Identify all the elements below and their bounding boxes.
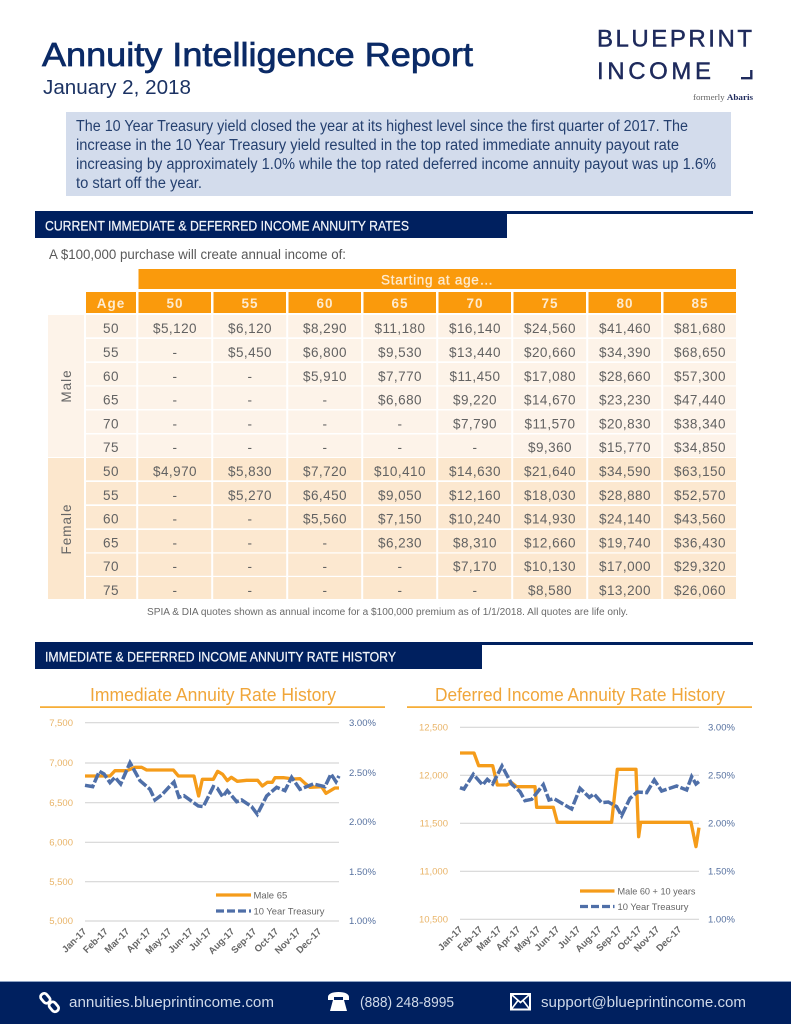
row: female 70: $10,130	[524, 559, 576, 574]
table column headers: 85	[691, 296, 709, 311]
x axis labels: Apr-17	[125, 926, 154, 955]
row: female 60: -	[173, 512, 177, 526]
phone number: (888) 248-8995	[360, 994, 454, 1011]
row: male 65: -	[323, 392, 327, 408]
row: male 75	[103, 440, 726, 455]
left axis: 5,500	[49, 877, 73, 888]
row: female 55: $6,450	[303, 488, 347, 503]
section heading: current rates: CURRENT IMMEDIATE & DEFERRED INCOME ANNUITY RATES	[45, 218, 409, 234]
row: female 75: -	[473, 583, 477, 598]
table column headers: 75	[541, 296, 559, 311]
row: female 50: $5,830	[228, 464, 272, 479]
table column headers: 50	[166, 296, 184, 311]
x axis labels: May-17	[144, 926, 174, 957]
row: male 75: $9,360	[528, 440, 572, 455]
row: male 75: $15,770	[599, 440, 651, 455]
x axis labels: Mar-17	[103, 926, 132, 956]
row: male 75: -	[323, 440, 327, 455]
summary callout: increasing by approximately 1.0% while the top rated deferred income annuity payout was up 1.6%	[76, 156, 716, 173]
row: male 70: -	[323, 416, 327, 432]
row: female 60: $14,930	[524, 512, 576, 526]
right axis: 1.00%	[708, 914, 735, 926]
legend: 10 Year Treasury	[254, 906, 325, 918]
x axis labels: Feb-17	[81, 926, 111, 956]
row: male 60: $5,910	[303, 369, 347, 384]
row: female 65: $19,740	[599, 536, 651, 550]
row: female 75: -	[173, 583, 177, 598]
right axis: 2.00%	[708, 818, 735, 830]
x axis labels: Jul-17	[556, 924, 583, 952]
legend: 10 Year Treasury	[618, 902, 689, 913]
section heading: current rates	[35, 211, 753, 238]
row: male 55: 55	[103, 345, 119, 360]
row: male 55: $68,650	[674, 345, 726, 360]
row: female 60	[103, 512, 726, 526]
website address: annuities.blueprintincome.com	[69, 994, 274, 1011]
row: male 70: -	[173, 416, 177, 432]
left axis: 7,000	[49, 758, 73, 769]
footer contact bar	[0, 981, 791, 1024]
row: male 60: $57,300	[674, 369, 726, 384]
row: female 50: $34,590	[599, 464, 651, 479]
row: male 65: $9,220	[453, 392, 497, 408]
row: female 55: $18,030	[524, 488, 576, 503]
x axis labels: Aug-17	[574, 924, 604, 955]
row: male 60: $11,450	[450, 369, 500, 384]
right axis: 3.00%	[349, 718, 376, 729]
icon: link	[39, 992, 60, 1013]
row: male 50: $8,290	[303, 321, 347, 336]
summary callout	[66, 112, 731, 196]
row: male 65: $6,680	[378, 392, 422, 408]
rates table	[48, 269, 736, 599]
row: female 50	[103, 464, 726, 479]
line: male 60 + 10 years	[460, 753, 699, 847]
row: female 65: $8,310	[453, 536, 497, 550]
right axis: 1.50%	[349, 867, 376, 878]
row: male 65: $14,670	[524, 392, 576, 408]
line: 10 year treasury	[85, 763, 339, 814]
row: female 65: $12,660	[524, 536, 576, 550]
row: male 50: $41,460	[599, 321, 651, 336]
logo: Blueprint Income: BLUEPRINT	[597, 26, 752, 52]
title: Annuity Intelligence Report	[42, 36, 473, 73]
row: male 65: $47,440	[674, 392, 726, 408]
row: female 50: $7,720	[303, 464, 347, 479]
row: male 75: -	[398, 440, 402, 455]
x axis labels: Sep-17	[229, 926, 259, 956]
gender label: male: Male	[59, 369, 74, 403]
section heading: rate history	[35, 642, 753, 669]
row: female 75: -	[398, 583, 402, 598]
row: male 50: $6,120	[228, 321, 272, 336]
left axis: 6,500	[49, 798, 73, 809]
chart: immediate annuity rate history	[40, 684, 385, 957]
x axis labels: Nov-17	[632, 924, 662, 955]
row: female 55: $12,160	[449, 488, 501, 503]
x axis labels: Dec-17	[294, 926, 324, 956]
row: male 55: $5,450	[228, 345, 272, 360]
row: male 75: -	[248, 440, 252, 455]
email address: support@blueprintincome.com	[541, 994, 746, 1011]
row: female 70: -	[173, 559, 177, 574]
row: female 70: $7,170	[453, 559, 497, 574]
row: female 75: -	[248, 583, 252, 598]
row: female 70	[103, 559, 726, 574]
icon: telephone	[328, 992, 349, 1011]
row: female 65	[103, 536, 726, 550]
row: male 50: $16,140	[449, 321, 501, 336]
x axis labels: Jul-17	[187, 926, 214, 954]
row: male 65: $23,230	[599, 392, 651, 408]
row: male 50: $81,680	[674, 321, 726, 336]
row: female 75: $13,200	[599, 583, 651, 598]
row: male 75: $34,850	[674, 440, 726, 455]
left axis: 7,500	[49, 718, 73, 729]
row: female 60: $43,560	[674, 512, 726, 526]
row: male 50: $11,180	[375, 321, 425, 336]
left axis: 11,500	[420, 818, 448, 830]
x axis labels: Jun-17	[166, 926, 196, 956]
left axis: 12,000	[419, 770, 448, 782]
legend	[580, 886, 696, 913]
date: January 2, 2018	[43, 76, 191, 99]
table column headers: Age	[97, 296, 125, 311]
x axis labels: Jun-17	[533, 924, 562, 954]
row: female 75: $26,060	[674, 583, 726, 598]
row: male 70: $11,570	[525, 416, 575, 432]
row: female 55: -	[173, 488, 177, 503]
x axis labels: Feb-17	[456, 924, 485, 954]
row: male 60	[103, 369, 726, 384]
table column headers: 55	[241, 296, 259, 311]
x axis labels: Dec-17	[654, 924, 684, 954]
row: male 60: 60	[103, 369, 119, 384]
row: male 55: $20,660	[524, 345, 576, 360]
left axis: 5,000	[49, 916, 73, 927]
row: female 70: -	[323, 559, 327, 574]
right axis: 1.00%	[349, 916, 376, 927]
gender label: female: Female	[59, 503, 74, 555]
chart: deferred income annuity rate history	[407, 684, 752, 955]
table column headers: 60	[316, 296, 334, 311]
summary callout: to start off the year.	[76, 175, 202, 192]
row: male 55: $13,440	[449, 345, 501, 360]
table column headers: 65	[391, 296, 409, 311]
table header: starting at age: Starting at age…	[381, 272, 493, 288]
left axis	[49, 718, 73, 927]
row: female 50: $14,630	[449, 464, 501, 479]
x axis labels: Nov-17	[273, 926, 303, 957]
row: male 55: $34,390	[599, 345, 651, 360]
left axis	[419, 722, 448, 926]
row: female 50: $63,150	[674, 464, 726, 479]
row: female 60: $24,140	[599, 512, 651, 526]
row: male 50: $24,560	[524, 321, 576, 336]
left axis: 12,500	[419, 722, 448, 734]
left axis: 11,000	[420, 866, 448, 878]
row: female 75: 75	[103, 583, 119, 598]
row: female 50: $4,970	[153, 464, 197, 479]
chart title: Immediate Annuity Rate History	[90, 684, 337, 705]
logo: Blueprint Income: INCOME	[597, 58, 711, 85]
chart title: Deferred Income Annuity Rate History	[435, 684, 726, 705]
x axis labels: May-17	[513, 924, 543, 955]
row: male 55: $6,800	[303, 345, 347, 360]
row: female 50: 50	[103, 464, 119, 479]
gender label: female	[48, 458, 84, 599]
row: female 60: 60	[103, 512, 119, 526]
x axis labels	[436, 924, 684, 955]
row backgrounds	[86, 315, 736, 599]
right axis: 2.00%	[349, 817, 376, 828]
x axis labels: Apr-17	[494, 924, 523, 953]
right axis: 2.50%	[708, 770, 735, 782]
row: female 75: -	[323, 583, 327, 598]
section heading: rate history: IMMEDIATE & DEFERRED INCOME ANNUITY RATE HISTORY	[45, 648, 397, 664]
row: female 60: $10,240	[449, 512, 501, 526]
row: male 65	[103, 392, 726, 408]
logo: Blueprint Income	[597, 26, 753, 102]
row: female 70: -	[398, 559, 402, 574]
row: male 55	[103, 345, 726, 360]
row: male 65: -	[173, 392, 177, 408]
row: female 65: -	[248, 536, 252, 550]
row: female 60: $7,150	[378, 512, 422, 526]
table intro text: A $100,000 purchase will create annual income of:	[49, 247, 346, 262]
row: male 60: $7,770	[378, 369, 422, 384]
right axis: 1.50%	[708, 866, 735, 878]
row: female 70: 70	[103, 559, 119, 574]
left axis: 6,000	[49, 838, 73, 848]
row: female 75	[103, 583, 726, 598]
row: female 50: $10,410	[374, 464, 426, 479]
row: female 60: $5,560	[303, 512, 347, 526]
row: male 75: 75	[103, 440, 119, 455]
right axis	[708, 722, 735, 926]
right axis: 2.50%	[349, 768, 376, 779]
line: 10 year treasury	[460, 766, 699, 816]
row: male 65: -	[248, 392, 252, 408]
summary callout: increase in the 10 Year Treasury yield resulted in the top rated immediate annuity payout rate	[76, 137, 679, 154]
row: male 50	[103, 321, 726, 336]
row: male 75: -	[473, 440, 477, 455]
table column headers: 80	[616, 296, 634, 311]
row: male 70: -	[398, 416, 402, 432]
row: male 50: $5,120	[153, 321, 197, 336]
row: female 55: 55	[103, 488, 119, 503]
row: male 75: -	[173, 440, 177, 455]
row: female 55: $28,880	[599, 488, 651, 503]
table column headers: 70	[466, 296, 484, 311]
right axis	[349, 718, 376, 927]
row: female 65: 65	[103, 536, 119, 550]
right axis: 3.00%	[708, 722, 735, 734]
row: male 70: -	[248, 416, 252, 432]
row: female 70: $17,000	[599, 559, 651, 574]
x axis labels: Mar-17	[475, 924, 504, 954]
row: female 55: $9,050	[378, 488, 422, 503]
summary callout: The 10 Year Treasury yield closed the year at its highest level since the first quarter of 2017. The	[76, 118, 688, 135]
left axis: 10,500	[419, 914, 448, 926]
x axis labels: Jan-17	[436, 924, 465, 953]
row: female 65: $6,230	[378, 536, 422, 550]
row: male 65: 65	[103, 392, 119, 408]
icon: envelope	[511, 994, 530, 1010]
x axis labels: Aug-17	[207, 926, 237, 957]
row: female 60: -	[248, 512, 252, 526]
x axis labels: Oct-17	[252, 926, 281, 955]
row: female 55: $52,570	[674, 488, 726, 503]
row: male 70: 70	[103, 416, 119, 432]
row: female 55	[103, 488, 726, 503]
row: male 55: -	[173, 345, 177, 360]
row: male 60: -	[248, 369, 252, 384]
row: male 55: $9,530	[378, 345, 422, 360]
line: male 65	[85, 767, 339, 796]
row: male 60: $17,080	[524, 369, 576, 384]
table column headers	[86, 292, 736, 313]
row: male 70	[103, 416, 726, 432]
logo: Blueprint Income: formerly Abaris	[693, 93, 753, 102]
row: male 50: 50	[103, 321, 119, 336]
row: female 50: $21,640	[524, 464, 576, 479]
legend: Male 60 + 10 years	[618, 886, 696, 898]
row: female 70: -	[248, 559, 252, 574]
x axis labels: Jan-17	[60, 926, 89, 955]
legend: Male 65	[254, 890, 287, 902]
x axis labels	[60, 926, 324, 957]
row: male 60: $28,660	[599, 369, 651, 384]
row: female 65: $36,430	[674, 536, 726, 550]
row: female 75: $8,580	[528, 583, 572, 598]
row: male 70: $20,830	[599, 416, 651, 432]
table footnote: SPIA & DIA quotes shown as annual income for a $100,000 premium as of 1/1/2018. All quotes are life only.	[147, 607, 628, 618]
row: female 55: $5,270	[228, 488, 272, 503]
row: male 70: $7,790	[453, 416, 497, 432]
row: female 70: $29,320	[674, 559, 726, 574]
table header: starting at age	[138, 269, 736, 289]
legend	[216, 890, 325, 918]
row: female 65: -	[323, 536, 327, 550]
row: male 60: -	[173, 369, 177, 384]
gender label: male	[48, 315, 84, 457]
x axis labels: Sep-17	[594, 924, 624, 954]
row: male 70: $38,340	[674, 416, 726, 432]
row: female 65: -	[173, 536, 177, 550]
x axis labels: Oct-17	[615, 924, 644, 953]
